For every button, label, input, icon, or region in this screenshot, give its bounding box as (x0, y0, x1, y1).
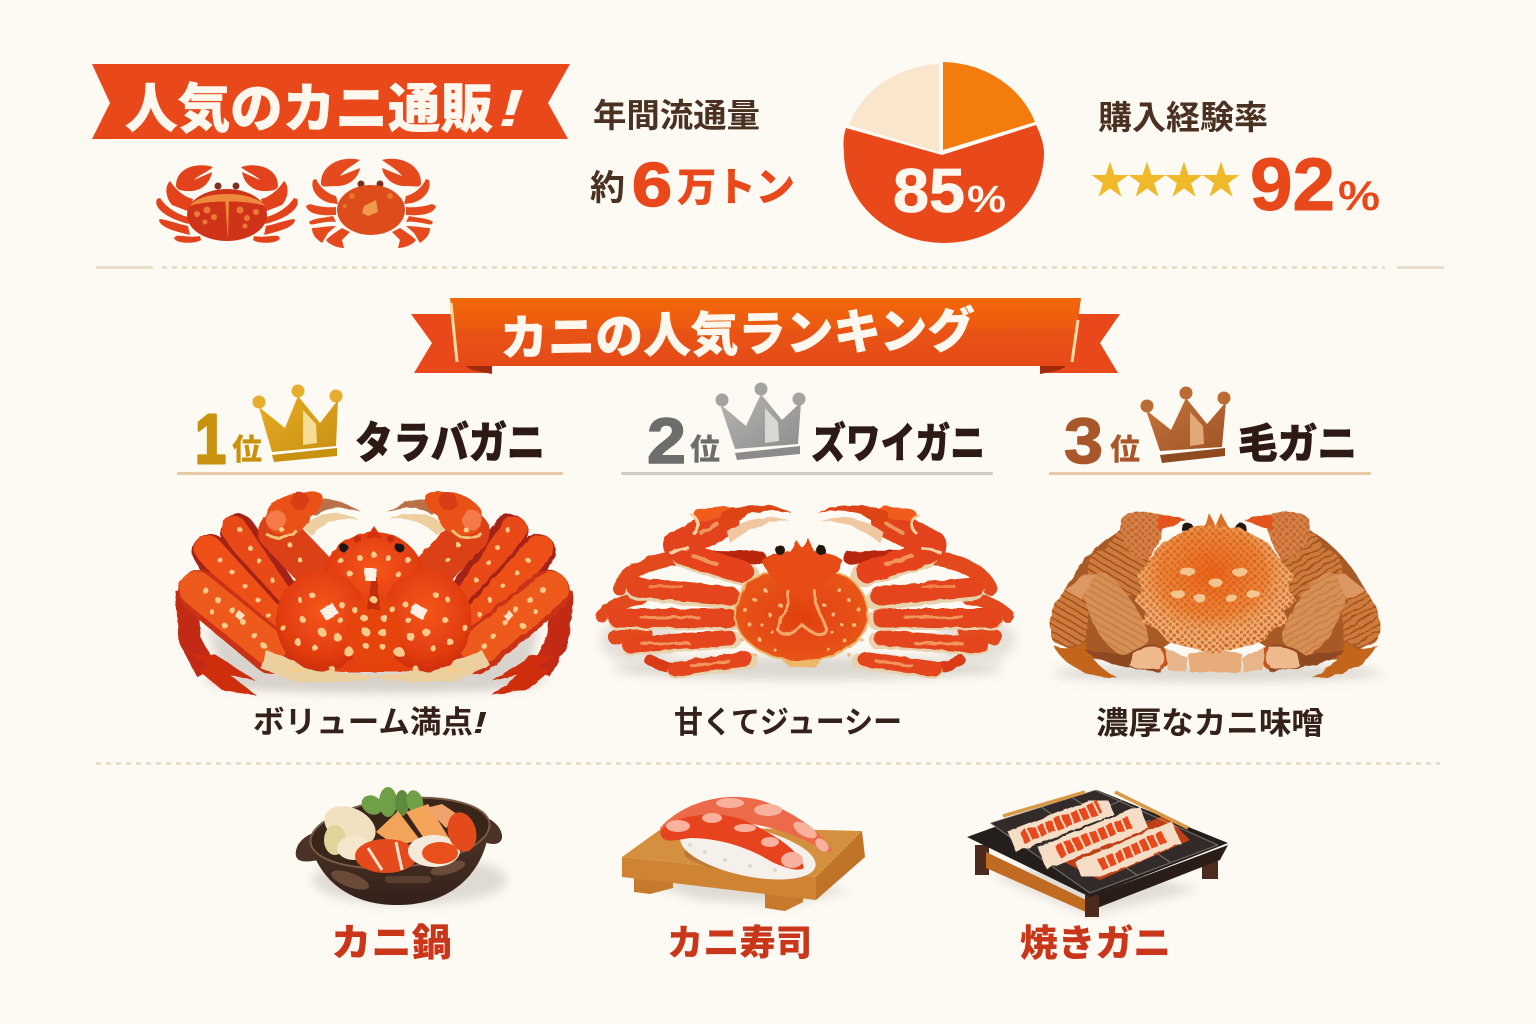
rank 3 heading (1049, 386, 1371, 477)
header banner: popular crab mail order (92, 64, 570, 139)
pie slice: orange (943, 62, 1035, 150)
shell (735, 572, 868, 662)
ribbon heading: crab popularity ranking: カニの人気ランキング (500, 304, 975, 366)
label: crab sushi: カニ寿司 (667, 922, 812, 963)
caption: hairy crab: 濃厚なカニ味噌 (1096, 706, 1324, 741)
grill top (967, 790, 1228, 897)
crab strips (1012, 804, 1176, 873)
rank 2 heading: 位 (690, 434, 720, 467)
rank 2 heading: ズワイガニ (811, 420, 985, 467)
pie label: 85%: % (967, 179, 1006, 221)
rank 2 heading: 2 (647, 405, 686, 477)
pot rim (307, 790, 493, 876)
illustration: hairy crab (1050, 512, 1383, 682)
sushi board right side (816, 831, 865, 900)
icon: stars (1092, 162, 1240, 197)
sushi board front (622, 857, 816, 900)
stat: purchase experience rate (1092, 99, 1380, 226)
illustration: king crab (186, 492, 562, 695)
stat: annual distribution volume: 6 (632, 151, 672, 220)
rank 1 heading (177, 384, 563, 478)
caption: snow crab: 甘くてジューシー (674, 705, 902, 740)
stat: annual distribution volume: 万トン (677, 166, 795, 210)
pie slice: red 85% (844, 125, 1044, 243)
stat: purchase experience rate: 購入経験率 (1098, 99, 1268, 136)
icon: gold crown (252, 384, 342, 462)
rice (676, 814, 820, 890)
stat: annual distribution volume (590, 97, 795, 220)
stat: annual distribution volume: 約 (590, 169, 625, 208)
icon: small round crab (306, 159, 436, 248)
grill side (986, 852, 1086, 912)
label: crab hot pot: カニ鍋 (331, 923, 452, 965)
illustration: snow crab (600, 505, 1015, 680)
illustration: crab sushi (622, 797, 865, 911)
icon: small spiky crab (156, 165, 298, 243)
cream underside (260, 650, 490, 682)
grill mesh (990, 790, 1218, 893)
rank 2 heading (621, 382, 993, 477)
rank 1 heading: タラバガニ (355, 419, 545, 468)
greens (358, 787, 426, 819)
illustration: crab hot pot (296, 787, 507, 905)
label: grilled crab: 焼きガニ (1020, 923, 1171, 964)
rank 3 heading: 毛ガニ (1238, 421, 1357, 467)
header banner: popular crab mail order: 人気のカニ通販 (125, 80, 493, 139)
header banner: popular crab mail order: ! (498, 80, 524, 138)
icon: bronze crown (1140, 386, 1230, 463)
sushi board top (622, 826, 862, 877)
rank 3 heading: 3 (1064, 405, 1103, 477)
stat: purchase experience rate: % (1338, 172, 1380, 219)
shell (278, 552, 470, 672)
caption: exclamation mark: ! (473, 705, 487, 740)
pot handles (296, 832, 326, 862)
pot bowl (312, 830, 489, 905)
rank 1 heading: 位 (232, 434, 262, 467)
sushi board feet (634, 874, 673, 894)
ingredients (318, 798, 382, 854)
grill legs (975, 845, 989, 875)
caption: king crab: ボリューム満点 (253, 705, 473, 740)
crab meat topping back (660, 797, 832, 853)
rank 1 heading: 1 (195, 400, 226, 478)
stat: annual distribution volume: 年間流通量 (593, 97, 760, 134)
shell (1205, 513, 1216, 527)
stat: purchase experience rate: 92 (1250, 143, 1335, 226)
rank 3 heading: 位 (1110, 434, 1140, 467)
icon: silver crown (716, 382, 806, 460)
ribbon heading: crab popularity ranking (411, 298, 1120, 374)
crab meat topping front (660, 815, 804, 870)
pie label: 85%: 85 (893, 157, 965, 226)
pie slice: cream (849, 64, 939, 152)
pie label: 85% (893, 157, 1006, 226)
chopsticks (1003, 792, 1188, 828)
pie chart: 85% (844, 62, 1044, 243)
illustration: grilled crab (967, 790, 1228, 917)
